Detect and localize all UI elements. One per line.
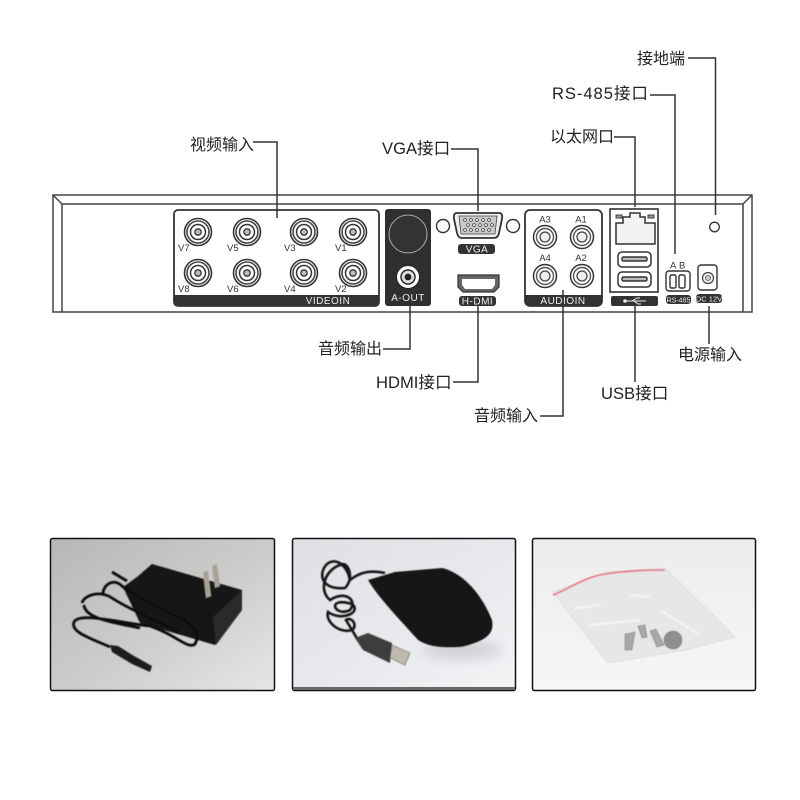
audio channel labels: A4 [539, 253, 551, 264]
panel: video inputs [174, 210, 379, 307]
panel: audio inputs [525, 210, 602, 307]
callout: ground terminal [637, 50, 716, 215]
VGA label [458, 244, 495, 256]
channel labels: V4 [284, 284, 296, 295]
channel labels: V7 [178, 243, 190, 254]
channel labels: V8 [178, 284, 190, 295]
BNC connector row 1 [184, 218, 366, 246]
panel: audio out [385, 209, 431, 306]
USB plug body [355, 633, 392, 663]
adapter side face [213, 590, 242, 645]
callout: audio input [474, 290, 563, 425]
callout: audio output: 音频输出 [318, 340, 382, 358]
cable tangle [322, 561, 385, 640]
DC plug [110, 645, 152, 672]
plastic bag [553, 568, 735, 663]
photo: USB mouse [292, 538, 516, 690]
BNC connector row 2 [184, 260, 366, 286]
VIDEOIN label: VIDEOIN [306, 296, 350, 307]
icon: USB ports [618, 252, 651, 287]
panel: RS-485 terminal: B [679, 260, 685, 272]
callout: USB [601, 306, 668, 403]
callout: ethernet: 以太网口 [550, 128, 614, 146]
channel labels: V1 [335, 243, 347, 254]
panel: DC 12V socket: DC 12V [696, 294, 722, 304]
callout: VGA: VGA接口 [382, 139, 450, 158]
audio channel labels: A3 [539, 214, 551, 226]
adapter body [123, 564, 242, 645]
channel labels: V6 [227, 284, 239, 295]
device rear panel outline [53, 195, 752, 312]
callout: RS-485 [552, 84, 675, 254]
callout: HDMI: HDMI接口 [376, 373, 452, 392]
channel labels [178, 243, 347, 295]
red zip line [553, 570, 665, 595]
channel labels: V2 [335, 284, 347, 295]
callout: VGA [382, 139, 478, 211]
callout: USB: USB接口 [601, 384, 668, 403]
callout: HDMI [376, 306, 478, 392]
RCA connectors [534, 226, 594, 288]
callout: RS-485: RS-485接口 [552, 84, 648, 103]
icon: USB symbol band [611, 296, 658, 306]
callout: video input [190, 136, 277, 218]
callout: ground terminal: 接地端 [637, 50, 685, 68]
USB plug metal [390, 645, 410, 665]
panel: RS-485 terminal: RS-485 [667, 298, 690, 304]
bottom shadow strip [293, 687, 515, 690]
photo: power adapter [50, 538, 274, 690]
HDMI port opening [462, 279, 495, 289]
callout: power input: 电源输入 [678, 346, 742, 364]
callout: audio output [318, 306, 410, 358]
icon: VGA port [436, 213, 520, 238]
audio channel labels [539, 214, 587, 264]
H-DMI label: H-DMI [462, 296, 493, 308]
panel: RS-485 terminal: A [670, 260, 677, 272]
screws [625, 625, 682, 650]
channel labels: V5 [227, 243, 239, 254]
panel: DC 12V socket [696, 265, 722, 304]
AUDIOIN label: AUDIOIN [540, 296, 586, 307]
mouse body [368, 568, 492, 647]
callout: audio input: 音频输入 [474, 407, 538, 425]
audio channel labels: A2 [575, 253, 587, 264]
panel: RS-485 terminal [666, 260, 691, 304]
panel: ethernet and USB ports [610, 209, 658, 292]
icon: ethernet port [616, 213, 655, 244]
channel labels: V3 [284, 243, 296, 254]
cable loops [73, 572, 197, 647]
plug prongs [203, 564, 220, 598]
callout: ethernet [550, 128, 635, 207]
callout: video input: 视频输入 [190, 136, 254, 154]
callout: power input [678, 306, 742, 364]
mouse shadow [422, 641, 502, 659]
photo: screw bag [532, 538, 756, 690]
icon: HDMI port [458, 275, 499, 292]
icon: ground terminal [710, 222, 719, 232]
audio channel labels: A1 [575, 214, 587, 226]
bag highlights [575, 595, 700, 635]
VGA label: VGA [466, 244, 488, 256]
panel: audio out: A-OUT [391, 293, 425, 304]
